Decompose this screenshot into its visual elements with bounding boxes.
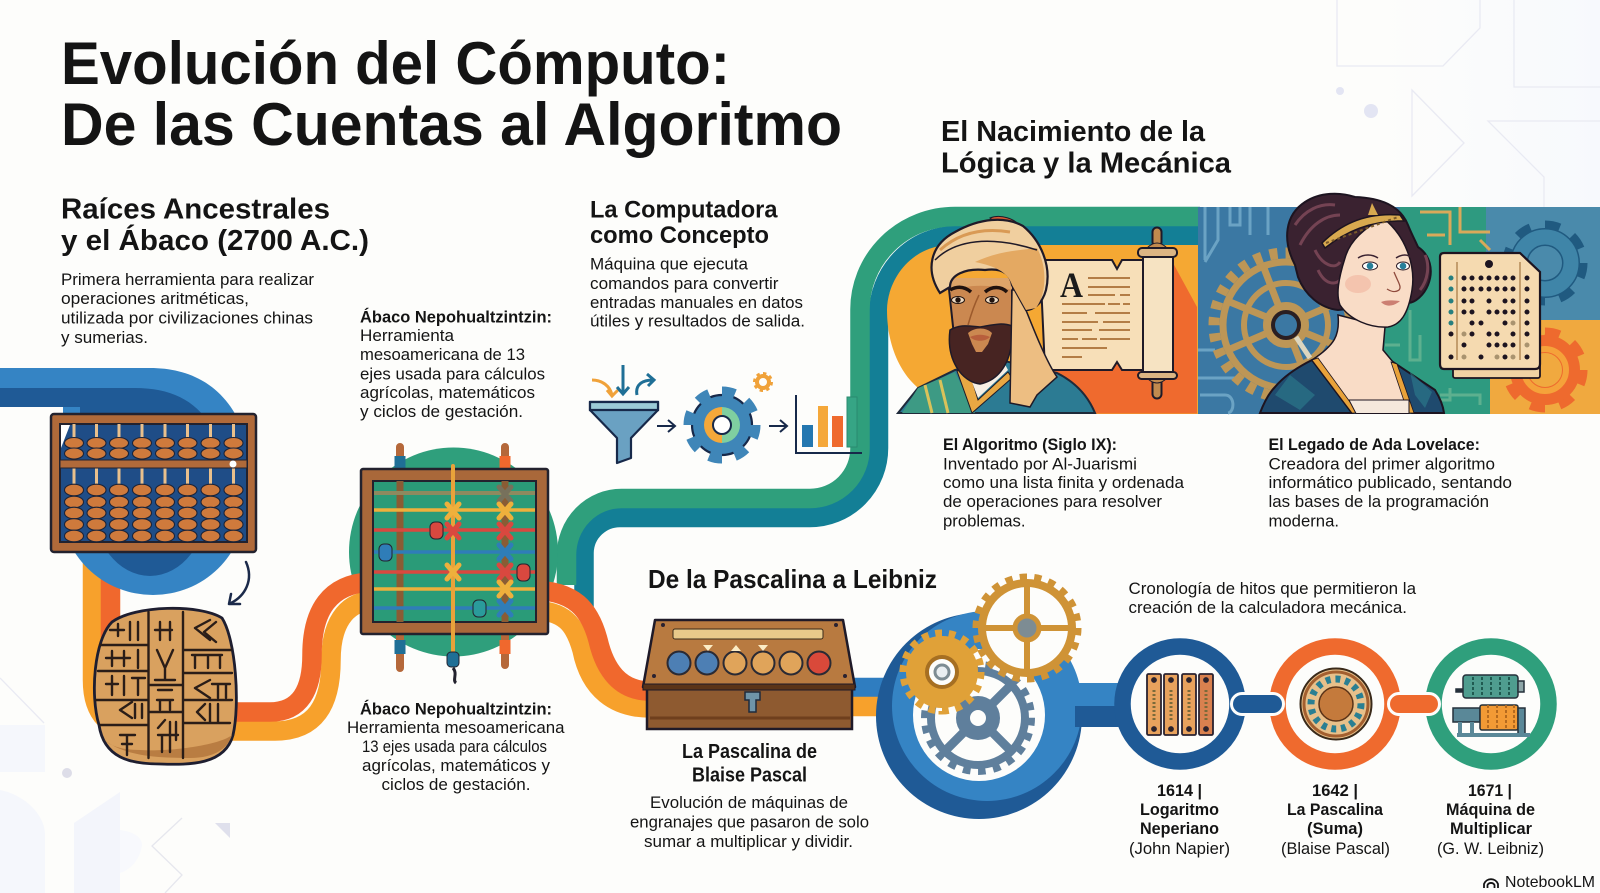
label: 1614: (John Napier) [1129,840,1230,858]
text block: la pascalina de blaise pascal: La Pascalina de [682,741,817,763]
text block: ábaco nepohualtzintzin upper: Herramienta [360,326,455,345]
label: 1642: La Pascalina [1287,801,1384,819]
text block: el legado de ada lovelace: moderna. [1268,512,1339,530]
text block: primera herramienta: utilizada por civilizaciones chinas [61,308,313,328]
heading: raíces ancestrales [61,194,369,257]
timeline: 1671 máquina de multiplicar [1434,646,1548,858]
icon: steel gear [925,665,1031,771]
text block: el algoritmo: Inventado por Al-Juarismi [943,454,1137,474]
icon: pascalina dial [1300,668,1372,740]
heading: el nacimiento de la lógica [941,116,1232,180]
text block: ábaco nepohualtzintzin upper [360,308,552,421]
text block: ábaco nepohualtzintzin upper: y ciclos de gestación. [360,402,523,421]
text block: ábaco nepohualtzintzin lower: ciclos de gestación. [382,775,530,794]
text block: máquina que ejecuta: comandos para convertir [590,274,779,293]
heading: raíces ancestrales: y el Ábaco (2700 A.C.) [61,223,369,257]
ribbon: blue start [0,368,245,595]
label: 1671: (G. W. Leibniz) [1437,840,1544,858]
label: 1614: Neperiano [1140,820,1219,838]
title: Evolución del Cómputo: [61,30,730,97]
heading: de la pascalina a leibniz: De la Pascalina a Leibniz [648,564,937,594]
timeline connector: orange pill [1390,695,1438,713]
timeline: 1642 la pascalina [1278,646,1392,858]
text block: ábaco nepohualtzintzin upper: agrícolas, matemáticos [360,383,535,402]
icon: napier rods [1147,674,1213,735]
icon: parchment scroll: A [1060,265,1083,305]
label: 1614 [1129,782,1230,858]
panel: ada lovelace illustration [1198,194,1600,414]
heading: la computadora como concepto: La Computadora [590,196,778,224]
arrow: abacus to tablet [229,562,249,604]
label: 1671: Multiplicar [1450,820,1533,838]
label: 1614: 1614 | [1157,782,1202,800]
text block: máquina que ejecuta [590,254,805,330]
text block: ábaco nepohualtzintzin lower: 13 ejes usada para cálculos [362,737,547,756]
title [61,30,842,158]
text block: el legado de ada lovelace [1268,435,1512,530]
text block: ábaco nepohualtzintzin upper: ejes usada para cálculos [360,364,545,384]
text block: evolución de máquinas: Evolución de máquinas de [650,793,848,812]
icon: parchment scroll [1040,232,1177,394]
figure: ada lovelace [1260,194,1444,414]
icon: data input process output flow [590,365,862,463]
icon: punched card [1440,253,1540,378]
label: 1671: Máquina de [1446,801,1535,819]
title: De las Cuentas al Algoritmo [61,91,842,158]
text block: el algoritmo: como una lista finita y ordenada [943,473,1185,492]
heading: la computadora como concepto [590,196,778,249]
icon: gold gear with spokes [976,577,1078,679]
icon: cuneiform tablet [94,608,236,764]
text block: el algoritmo: problemas. [943,512,1026,530]
text block: el legado de ada lovelace: las bases de la programación [1268,492,1489,511]
icon: pascalina box [643,620,855,729]
text block: primera herramienta [61,270,314,347]
text block: primera herramienta: Primera herramienta para realizar [61,270,314,289]
text block: el algoritmo: El Algoritmo (Siglo IX): [943,435,1117,454]
text block: ábaco nepohualtzintzin upper: Ábaco Nepohualtzintzin: [360,308,552,326]
label: 1671: 1671 | [1468,782,1512,800]
text block: primera herramienta: y sumerias. [61,328,148,347]
icon: green circle behind nepohualtzintzin [349,448,558,656]
panel: al-juarismi illustration [887,216,1198,414]
text block: la pascalina de blaise pascal [682,741,817,786]
text block: evolución de máquinas: engranajes que pasaron de solo [630,812,869,832]
timeline connector: blue pill [1233,695,1282,713]
ribbon: green and teal path [566,216,1200,610]
text block: ábaco nepohualtzintzin upper: mesoamericana de 13 [360,345,525,364]
heading: el nacimiento de la lógica: El Nacimiento de la [941,116,1206,148]
text block: primera herramienta: operaciones aritméticas, [61,289,249,308]
text block: máquina que ejecuta: útiles y resultados de salida. [590,312,805,330]
label: 1642: (Suma) [1307,820,1363,838]
figure: al-juarismi [898,216,1095,413]
text block: ábaco nepohualtzintzin lower: agrícolas, matemáticos y [362,756,550,775]
icon: leibniz machine [1453,675,1530,735]
icon: blue gear ring [876,611,1082,819]
text block: cronología: Cronología de hitos que permitieron la [1128,579,1417,598]
text block: ábaco nepohualtzintzin lower: Herramienta mesoamericana [347,718,565,737]
text block: cronología [1128,579,1417,617]
text block: evolución de máquinas: sumar a multiplicar y dividir. [644,832,853,851]
text block: ábaco nepohualtzintzin lower: Ábaco Nepohualtzintzin: [360,700,552,718]
text block: evolución de máquinas [630,793,869,851]
heading: el nacimiento de la lógica: Lógica y la Mecánica [941,148,1232,180]
label: 1642: (Blaise Pascal) [1281,840,1390,858]
icon: golden mechanical gear [1214,253,1358,397]
icon: abacus [51,414,256,552]
text block: el legado de ada lovelace: informático publicado, sentando [1268,473,1512,492]
label: 1642: 1642 | [1312,782,1358,800]
timeline: 1614 logaritmo neperiano [1122,646,1238,858]
label: 1614: Logaritmo [1140,801,1219,819]
icon: blue gear [1508,226,1582,300]
heading: raíces ancestrales: Raíces Ancestrales [61,194,330,226]
footer: notebooklm logo: NotebookLM [1505,874,1595,891]
text block: la pascalina de blaise pascal: Blaise Pascal [692,764,807,786]
icon: orange gear [1508,334,1582,406]
text block: el algoritmo: de operaciones para resolver [943,492,1162,511]
text block: ábaco nepohualtzintzin lower [347,700,565,794]
icon: nepohualtzintzin [361,447,548,683]
ribbon: orange path [92,540,650,731]
heading: la computadora como concepto: como Concepto [590,222,769,249]
text block: máquina que ejecuta: Máquina que ejecuta [590,254,749,274]
text block: el algoritmo [943,435,1185,530]
ribbon: connector to timeline [1075,695,1125,716]
text block: cronología: creación de la calculadora mecánica. [1128,598,1407,617]
text block: el legado de ada lovelace: El Legado de Ada Lovelace: [1268,435,1480,454]
ribbon: connectors into gear ring [845,688,915,706]
text block: el legado de ada lovelace: Creadora del primer algoritmo [1268,454,1495,474]
label: 1642 [1281,782,1390,858]
text block: máquina que ejecuta: entradas manuales en datos [590,293,803,312]
icon: small gold gear [903,633,981,711]
label: 1671 [1437,782,1544,858]
